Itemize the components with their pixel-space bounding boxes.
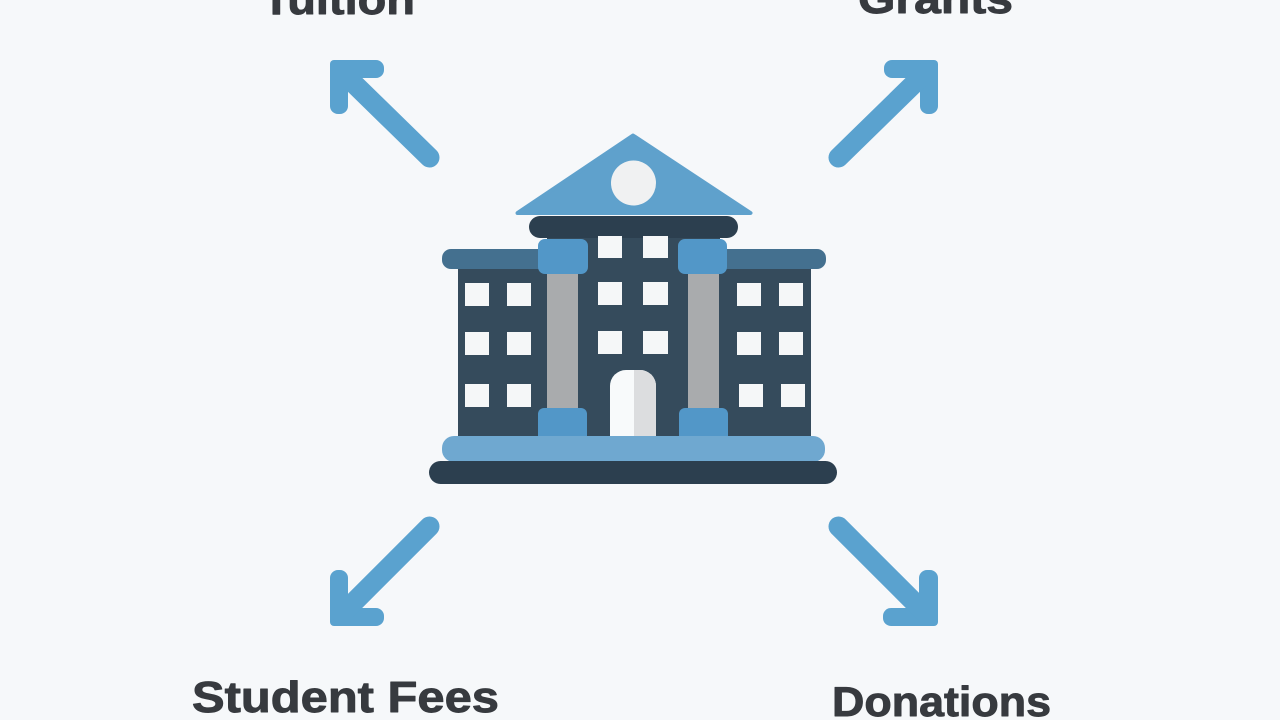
roof pediment [518, 136, 750, 213]
windows [465, 236, 805, 407]
left column capital [538, 239, 588, 274]
icon: university building [429, 136, 837, 484]
arrow: top left, towards Tuition [330, 60, 430, 158]
arrow: bottom left, towards Student Fees [330, 526, 430, 626]
left wing cornice [442, 249, 552, 269]
roof medallion [611, 160, 656, 206]
entablature bar [529, 216, 738, 238]
central block wall [547, 232, 720, 436]
left wing and right wing walls [458, 262, 811, 436]
right column shaft [688, 270, 719, 410]
door [610, 370, 656, 436]
left column base [538, 408, 587, 436]
plinth [442, 436, 825, 462]
arrow: top right, towards Grants [838, 60, 938, 158]
right column capital [678, 239, 727, 274]
right wing cornice [716, 249, 826, 269]
base step [429, 461, 837, 484]
left column shaft [547, 270, 578, 410]
right column base [679, 408, 728, 436]
arrow: bottom right, towards Donations [838, 526, 938, 626]
